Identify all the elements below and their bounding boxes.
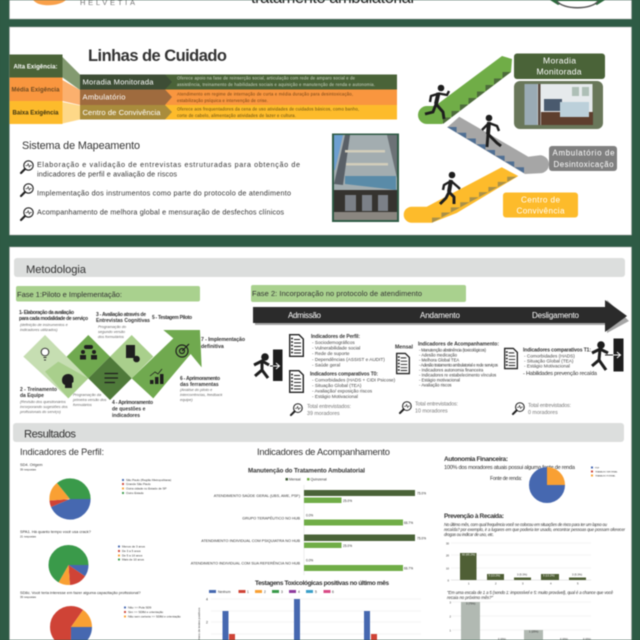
icon: walker [482, 115, 501, 147]
chart: manutenção do tratamento: 25.0% [343, 499, 352, 503]
icon: crest [550, 0, 605, 8]
legend: fonte de renda: TRABALHO INFORMAL [595, 470, 618, 474]
indicators: comparativos T1: - Comorbidades (HADS) [524, 354, 575, 358]
step 6 text: 6 - Aprimoramento [180, 376, 220, 382]
icon: exit figure and door [592, 338, 624, 372]
legend: testagens: 3 [281, 590, 283, 594]
row: Moradia Monitorada: Moradia Monitorada [82, 78, 154, 86]
chart: testagens toxicológicas [197, 580, 421, 640]
heading bar: Fase 2 [251, 285, 466, 302]
bullet 3: Acompanhamento de melhora global e mensuração de desfechos clínicos [37, 208, 284, 216]
chart: tempo de uso pie: 21 respostas [20, 534, 37, 538]
heading: Linhas de Cuidado: Linhas de Cuidado [88, 47, 227, 65]
indicators: acompanhamento: - Manutenção abstinência (toxicológicos) [419, 348, 487, 352]
heading bar: Resultados [13, 423, 624, 442]
step 2 text [19, 387, 68, 414]
tier: Baixa Exigência [10, 101, 80, 124]
icon: document [290, 371, 303, 392]
bullet 2 [21, 184, 291, 198]
stage: Andamento: Andamento [420, 311, 461, 320]
legend: testagens: 1 [247, 590, 249, 594]
tier: Alta Exigência [10, 54, 80, 90]
bullet 1: Elaboração e validação de entrevistas estruturadas para obtenção de [37, 160, 300, 169]
legend: origem: São Paulo (Região Metropolitana) [126, 478, 171, 482]
heading bar: Resultados: Resultados [24, 428, 76, 440]
chart: manutenção do tratamento: ATENDIMENTO INDIVIDUAL COM SUA REFERÊNCIA NO HUB [191, 560, 300, 566]
legend: mensal quinzenal: Mensal [289, 478, 301, 482]
row: Moradia Monitorada: Oferece apoio na fase de reinserção social, articulação com rede de amparo social e de [177, 76, 356, 80]
chart: frequência de risco: 10 [446, 566, 449, 570]
chart: frequência de risco: 60 (65.2%) [462, 552, 475, 556]
icon: walker [440, 172, 460, 204]
step 1 text: (definição de instrumentos e [20, 323, 68, 327]
label: Ambulatório de Desintoxicação [549, 146, 617, 171]
legend: testagens [209, 590, 334, 594]
icon: orange logo [33, 0, 66, 5]
heading bar: Metodologia: Metodologia [26, 264, 87, 276]
step 2 text: da Equipe [20, 393, 44, 399]
chart: frequência de risco: 3 (5.3%) [572, 572, 582, 576]
chart: frequência de risco: 20 [446, 554, 449, 558]
step 2 text: incorporando sugestões dos [20, 405, 68, 409]
label: Centro de Convivência [503, 192, 578, 218]
section: autonomia financeira: Fonte de renda: [490, 476, 522, 482]
total: andamento: 10 moradores [415, 408, 448, 414]
total: desligamento: Total entrevistados: [528, 403, 571, 409]
programming note: primeira versão dos [72, 398, 106, 402]
section: autonomia financeira: Autonomia Financeira: [444, 456, 508, 463]
label: Moradia Monitorada: Monitorada [536, 66, 582, 76]
column: andamento [395, 342, 499, 414]
step 1 text [19, 310, 88, 332]
total: andamento: Total entrevistados: [415, 402, 458, 408]
step 6 text: equipe) [180, 398, 193, 402]
chart: frequência de risco: 3 (5.3%) [517, 572, 527, 576]
icon: target [176, 344, 189, 357]
icon: people [80, 345, 97, 360]
indicators: acompanhamento: - Estágio motivacional [419, 378, 460, 382]
bullet 2: Implementação dos instrumentos como parte do protocolo de atendimento [37, 188, 291, 198]
step 7 text [201, 337, 245, 350]
row: Ambulatório: estabilização psíquica e intervenção de crise. [177, 98, 268, 103]
chart: manutenção do tratamento [191, 468, 426, 575]
legend: fonte de renda: TRABALHO FORMAL [595, 474, 616, 478]
heading: Sistema de Mapeamento: Sistema de Mapeamento [22, 140, 140, 152]
programming note: Programação da [73, 393, 101, 397]
chart: capacitação pie: 39 respostas [20, 595, 37, 599]
section: autonomia financeira [444, 456, 618, 503]
row: Centro de Convivência [80, 105, 397, 120]
indicators: comparativos T1: - Situação Global (TEA) [524, 358, 574, 364]
chart: origem pie [20, 462, 171, 509]
chart: origem pie: 39 respostas [20, 468, 37, 472]
legend: tempo: De 5 a 10 anos [122, 554, 143, 558]
legend: origem: Grande São Paulo [126, 482, 151, 486]
chart: frequência de risco: 5 [577, 582, 579, 586]
total: admissão [291, 404, 351, 417]
chart: frequência de risco: 4 [550, 582, 552, 586]
column: admissão [254, 334, 396, 417]
indicators: comparativos T0 [310, 372, 396, 399]
escalator: yellow [404, 167, 518, 223]
total: admissão: 39 moradores [307, 411, 340, 417]
indicators: comparativos T1: Indicadores comparativos T1: [523, 348, 591, 354]
chart: manutenção do tratamento: ATENDIMENTO SAÚDE GERAL (UBS, AME, PSF) [214, 493, 301, 498]
chart: tempo de uso pie [20, 529, 146, 575]
heading bar: Fase 2: Fase 2: Incorporação no protocolo de atendimento [252, 289, 422, 298]
icon: head [62, 374, 74, 388]
legend: fonte de renda [591, 466, 618, 478]
indicators: perfil [311, 334, 385, 368]
legend: fonte de renda: PDF [595, 468, 600, 470]
icon: bulb [41, 348, 49, 360]
indicators: perfil: Indicadores de Perfil: [311, 334, 360, 340]
label: Centro de Convivência: Centro de [521, 196, 560, 204]
label: Moradia Monitorada: Moradia [543, 56, 576, 66]
section: autonomia financeira: 100% dos moradores atuais possui alguma fonte de renda [444, 465, 576, 471]
chart: capacitação pie [20, 590, 181, 638]
icon: document [126, 345, 140, 362]
legend: origem: Outro Estado [126, 491, 144, 495]
icon: growth chart [150, 369, 164, 384]
step 6 text: (Análise do piloto e [180, 388, 212, 392]
legend: tempo: Mais de 10 anos [122, 558, 145, 562]
step 3 text: Programação do [98, 325, 126, 329]
step 4 text: de questões e [112, 406, 146, 412]
total: andamento [400, 402, 458, 414]
indicators: comparativos T0: - Comorbidades (HADS + CIDI Psicose) [312, 378, 396, 382]
label: Ambulatório de Desintoxicação: Ambulatório de [552, 148, 615, 158]
legend: mensal quinzenal: Quinzenal [310, 478, 327, 482]
stage: Desligamento: Desligamento [532, 311, 580, 320]
indicators: perfil: - Rede de suporte [312, 351, 350, 356]
tier: Alta Exigência: Alta Exigência: [14, 64, 58, 70]
chart: frequência de risco: 1 [468, 582, 470, 586]
chart: testagens toxicológicas: 2 [206, 620, 208, 624]
legend: testagens: 6 [332, 590, 334, 594]
legend: testagens: Nenhum [218, 590, 231, 594]
step 4 text: indicadores [112, 413, 140, 419]
chart: manutenção do tratamento: 66.7% [404, 521, 413, 525]
programming note: formulários [73, 403, 92, 407]
icon: entry figure and door [254, 350, 282, 381]
step 3 text [96, 312, 150, 339]
chart: manutenção do tratamento: GRUPO TERAPÊUTICO NO HUB [242, 516, 300, 520]
chart: fonte de renda pie [529, 467, 565, 503]
chart: manutenção do tratamento: 66.7% [404, 566, 413, 570]
photo: interior [514, 81, 603, 129]
step 3 text: dos formulários [98, 335, 124, 339]
indicators: comparativos T1: - Estágio Motivacional [524, 364, 570, 368]
chart: chance de recaída: 1 (25%) [529, 630, 539, 634]
indicators: acompanhamento: - Avaliação riscos [419, 382, 452, 388]
indicators: acompanhamento: - Melhora Global TEA [419, 358, 459, 362]
chart: frequência de risco: 2 [495, 582, 497, 586]
step 1 text: para cada modalidade de serviço [19, 316, 88, 322]
step 5 text: 5 - Testagem Piloto [152, 315, 192, 321]
legend: origem [122, 478, 171, 495]
row: Moradia Monitorada: assistência, treinamento de habilidades sociais e aquisição e manutenção de renda e autonomia. [177, 82, 375, 87]
question text: "Em uma escala de 1 a 5 (sendo 1: impossível e 5: muito provável), qual é a chance que você [447, 590, 614, 595]
total: desligamento [513, 403, 571, 416]
indicators: perfil: - Saúde geral [312, 362, 340, 368]
row: Ambulatório: Ambulatório [82, 92, 126, 102]
section: prevenção à recaída: drogas ou indicar de uso, etc. [444, 532, 494, 537]
heading: Indicadores de Acompanhamento: Indicadores de Acompanhamento [257, 446, 390, 457]
label: Moradia Monitorada [514, 54, 605, 79]
total: desligamento: 0 moradores [528, 410, 558, 416]
escalator: grey [447, 115, 549, 174]
indicators: comparativos T0: - Avaliação/ exposição riscos [312, 388, 373, 394]
photo: building [332, 134, 399, 222]
chart: frequência de risco: 30 [446, 542, 449, 546]
indicators: comparativos T1: - Habilidades prevenção recaída [523, 371, 598, 377]
header panel [10, 0, 632, 19]
icon: document [290, 335, 303, 356]
column: desligamento [505, 338, 624, 416]
indicators: perfil: - Vulnerabilidade social [312, 346, 360, 350]
section: prevenção à recaída: recaída? por exemplo, ir a lugares em que poderia ter usado, encontrar pessoas que possam oferecer [444, 527, 626, 532]
indicators: acompanhamento [418, 342, 499, 388]
tier: Média Exigência [10, 78, 80, 105]
tier: Média Exigência: Média Exigência [12, 88, 60, 94]
chart: manutenção do tratamento: Manutenção do Tratamento Ambulatorial [248, 468, 365, 474]
legend: tempo: Menos de 3 anos [122, 544, 146, 548]
heading: Indicadores de Perfil: Indicadores de Perfil: [20, 447, 104, 457]
indicators: comparativos T0: - Situação Global (TEA) [312, 383, 362, 388]
step 3 text: segundo versão [98, 330, 125, 334]
indicators: acompanhamento: - Adesão tratamento ambulatorial e rede serviços [419, 362, 498, 368]
step 7 text: definitiva [201, 344, 224, 350]
step 1 text: 1- Elaboração da avaliação [19, 310, 74, 316]
stage: Admissão: Admissão [288, 311, 322, 320]
chart: manutenção do tratamento: 25.0% [343, 544, 352, 548]
legend: capacitação: Não >> Pula SD9 [128, 606, 152, 610]
section: prevenção à recaída: Prevenção à Recaída: [444, 513, 504, 520]
chart: testagens toxicológicas: Testagens Toxicológicas positivas no último mês [255, 580, 389, 587]
step 7 text: 7 - Implementação [201, 337, 245, 343]
chart: testagens toxicológicas: mero de testes positivos [197, 607, 201, 640]
chart: frequência de risco: 5 (13.2%) [488, 574, 500, 578]
legend: capacitação [124, 606, 181, 618]
chart: manutenção do tratamento: 0.0% [306, 514, 313, 518]
legend: mensal quinzenal [286, 478, 327, 482]
chart: manutenção do tratamento: 75.0% [417, 536, 426, 540]
bullet 1 [21, 160, 300, 178]
indicators: acompanhamento: - Indicadores autonomia financeira [419, 368, 484, 372]
legend: capacitação: Sim >> SD8d e orientação [128, 610, 164, 614]
question text: recaia no próximo mês?" [447, 595, 493, 600]
chart: tempo de uso pie: SPA1. Há quanto tempo você usa crack? [20, 529, 92, 534]
escalator: green [418, 56, 512, 124]
total: admissão: Total entrevistados: [307, 404, 351, 410]
tier: Baixa Exigência: Baixa Exigência [12, 110, 59, 116]
chart: chance de recaída: 3 [450, 600, 452, 604]
legend: capacitação: Não sem certeza >> SD8d e orientação [128, 614, 181, 618]
timeline arrow [253, 300, 629, 333]
chart: frequência de risco: 3 [522, 582, 524, 586]
chart: manutenção do tratamento: 75.0% [417, 492, 426, 496]
step 1 text: indicadores utilizados) [20, 328, 58, 332]
chart: frequência de risco: 5 (13.2%) [543, 574, 555, 578]
chart: chance de recaída [450, 600, 591, 640]
indicators: perfil: - Dependências (ASSIST e AUDIT) [312, 357, 385, 362]
step 4 text [112, 400, 153, 419]
indicators: perfil: - Sociodemográficos [312, 340, 355, 345]
step 6 text: das ferramentas [180, 382, 219, 388]
legend: testagens: 5 [315, 590, 317, 594]
label: Centro de Convivência: Convivência [516, 206, 565, 216]
section: prevenção à recaída [444, 513, 626, 640]
chart: chance de recaída: 1 [450, 628, 452, 632]
step 3 text: 3 - Avaliação através de [96, 312, 146, 318]
label: mensal: Mensal [395, 344, 413, 350]
icon: runner [425, 85, 449, 119]
icon: checklist [104, 374, 118, 382]
step 2 text: (Revisão dos questionários [20, 400, 66, 404]
legend: testagens: 4 [298, 590, 300, 594]
indicators: comparativos T0: - Estágio Motivacional [312, 394, 358, 399]
panel: linhas de cuidado [10, 27, 632, 235]
indicators: comparativos T1 [523, 348, 598, 377]
step 2 text: profissionais do serviço) [19, 410, 61, 414]
legend: tempo: De 3 a 5 anos [122, 549, 141, 553]
step 2 text: 2 - Treinamento [20, 387, 57, 393]
indicators: acompanhamento: - Adesão medicação [419, 352, 458, 358]
chart: chance de recaída: 3 (75%) [466, 602, 476, 606]
section: prevenção à recaída: No último mês, com qual frequência você se colocou em situações de risco para ter um lapso ou [444, 522, 608, 527]
legend: tempo [118, 544, 146, 562]
chart: manutenção do tratamento: ATENDIMENTO INDIVIDUAL COM PSIQUIATRA NO HUB [201, 539, 300, 543]
label: Ambulatório de Desintoxicação: Desintoxicação [554, 160, 614, 169]
chart: chance de recaída: 2 [450, 614, 452, 618]
row: Ambulatório: Atendimento em regime de internação de curta e média duração para desintoxicação, [177, 92, 353, 96]
row: Centro de Convivência: Oferece aos frequentadores da cena de uso atividades de cuidados básicos, como banho, [177, 106, 359, 112]
chart: manutenção do tratamento: 0.0% [306, 558, 313, 562]
chart: frequência de risco [446, 542, 591, 586]
chart: capacitação pie: SD8c. Você teria interesse em fazer alguma capacitação profissional? [20, 590, 142, 595]
row: Centro de Convivência: Centro de Convivência [82, 108, 161, 117]
heading bar: Fase 1: Fase 1:Piloto e Implementação: [17, 290, 122, 299]
indicators: acompanhamento: Indicadores de Acompanhamento: [418, 342, 499, 348]
legend: testagens: 2 [264, 590, 266, 594]
panel: metodologia and resultados [10, 247, 632, 640]
heading bar: Fase 1 [16, 286, 200, 302]
legend: origem: Outra cidade no Estado de SP [126, 486, 167, 490]
step 3 text: Entrevistas Cognitivas [96, 318, 150, 324]
heading bar: Metodologia [14, 258, 625, 277]
row: Ambulatório [80, 90, 397, 105]
programming note [72, 393, 106, 407]
row: Moradia Monitorada [80, 74, 397, 90]
row: Centro de Convivência: corte de cabelo, alimentação atividades de lazer e cultura. [177, 113, 296, 118]
bullet 3 [21, 208, 284, 220]
indicators: acompanhamento: - Indicadores re estabelecimento vínculos [419, 372, 496, 378]
chart: origem pie: SD4. Origem [20, 462, 42, 467]
step 6 text [180, 376, 224, 402]
chart: testagens toxicológicas: 4 [206, 598, 208, 602]
step 6 text: intercorrências, feedback [180, 393, 224, 397]
icon: document [505, 348, 517, 369]
step 4 text: 4 - Aprimoramento [112, 400, 153, 406]
chart: frequência de risco: 0 [448, 578, 450, 582]
question text [447, 590, 614, 600]
icon: document [397, 353, 409, 374]
bullet 1: indicadores de perfil e avaliação de riscos [37, 170, 177, 178]
indicators: comparativos T0: Indicadores comparativos T0: [310, 372, 378, 378]
diagram: fase 1 chevrons [19, 310, 245, 419]
